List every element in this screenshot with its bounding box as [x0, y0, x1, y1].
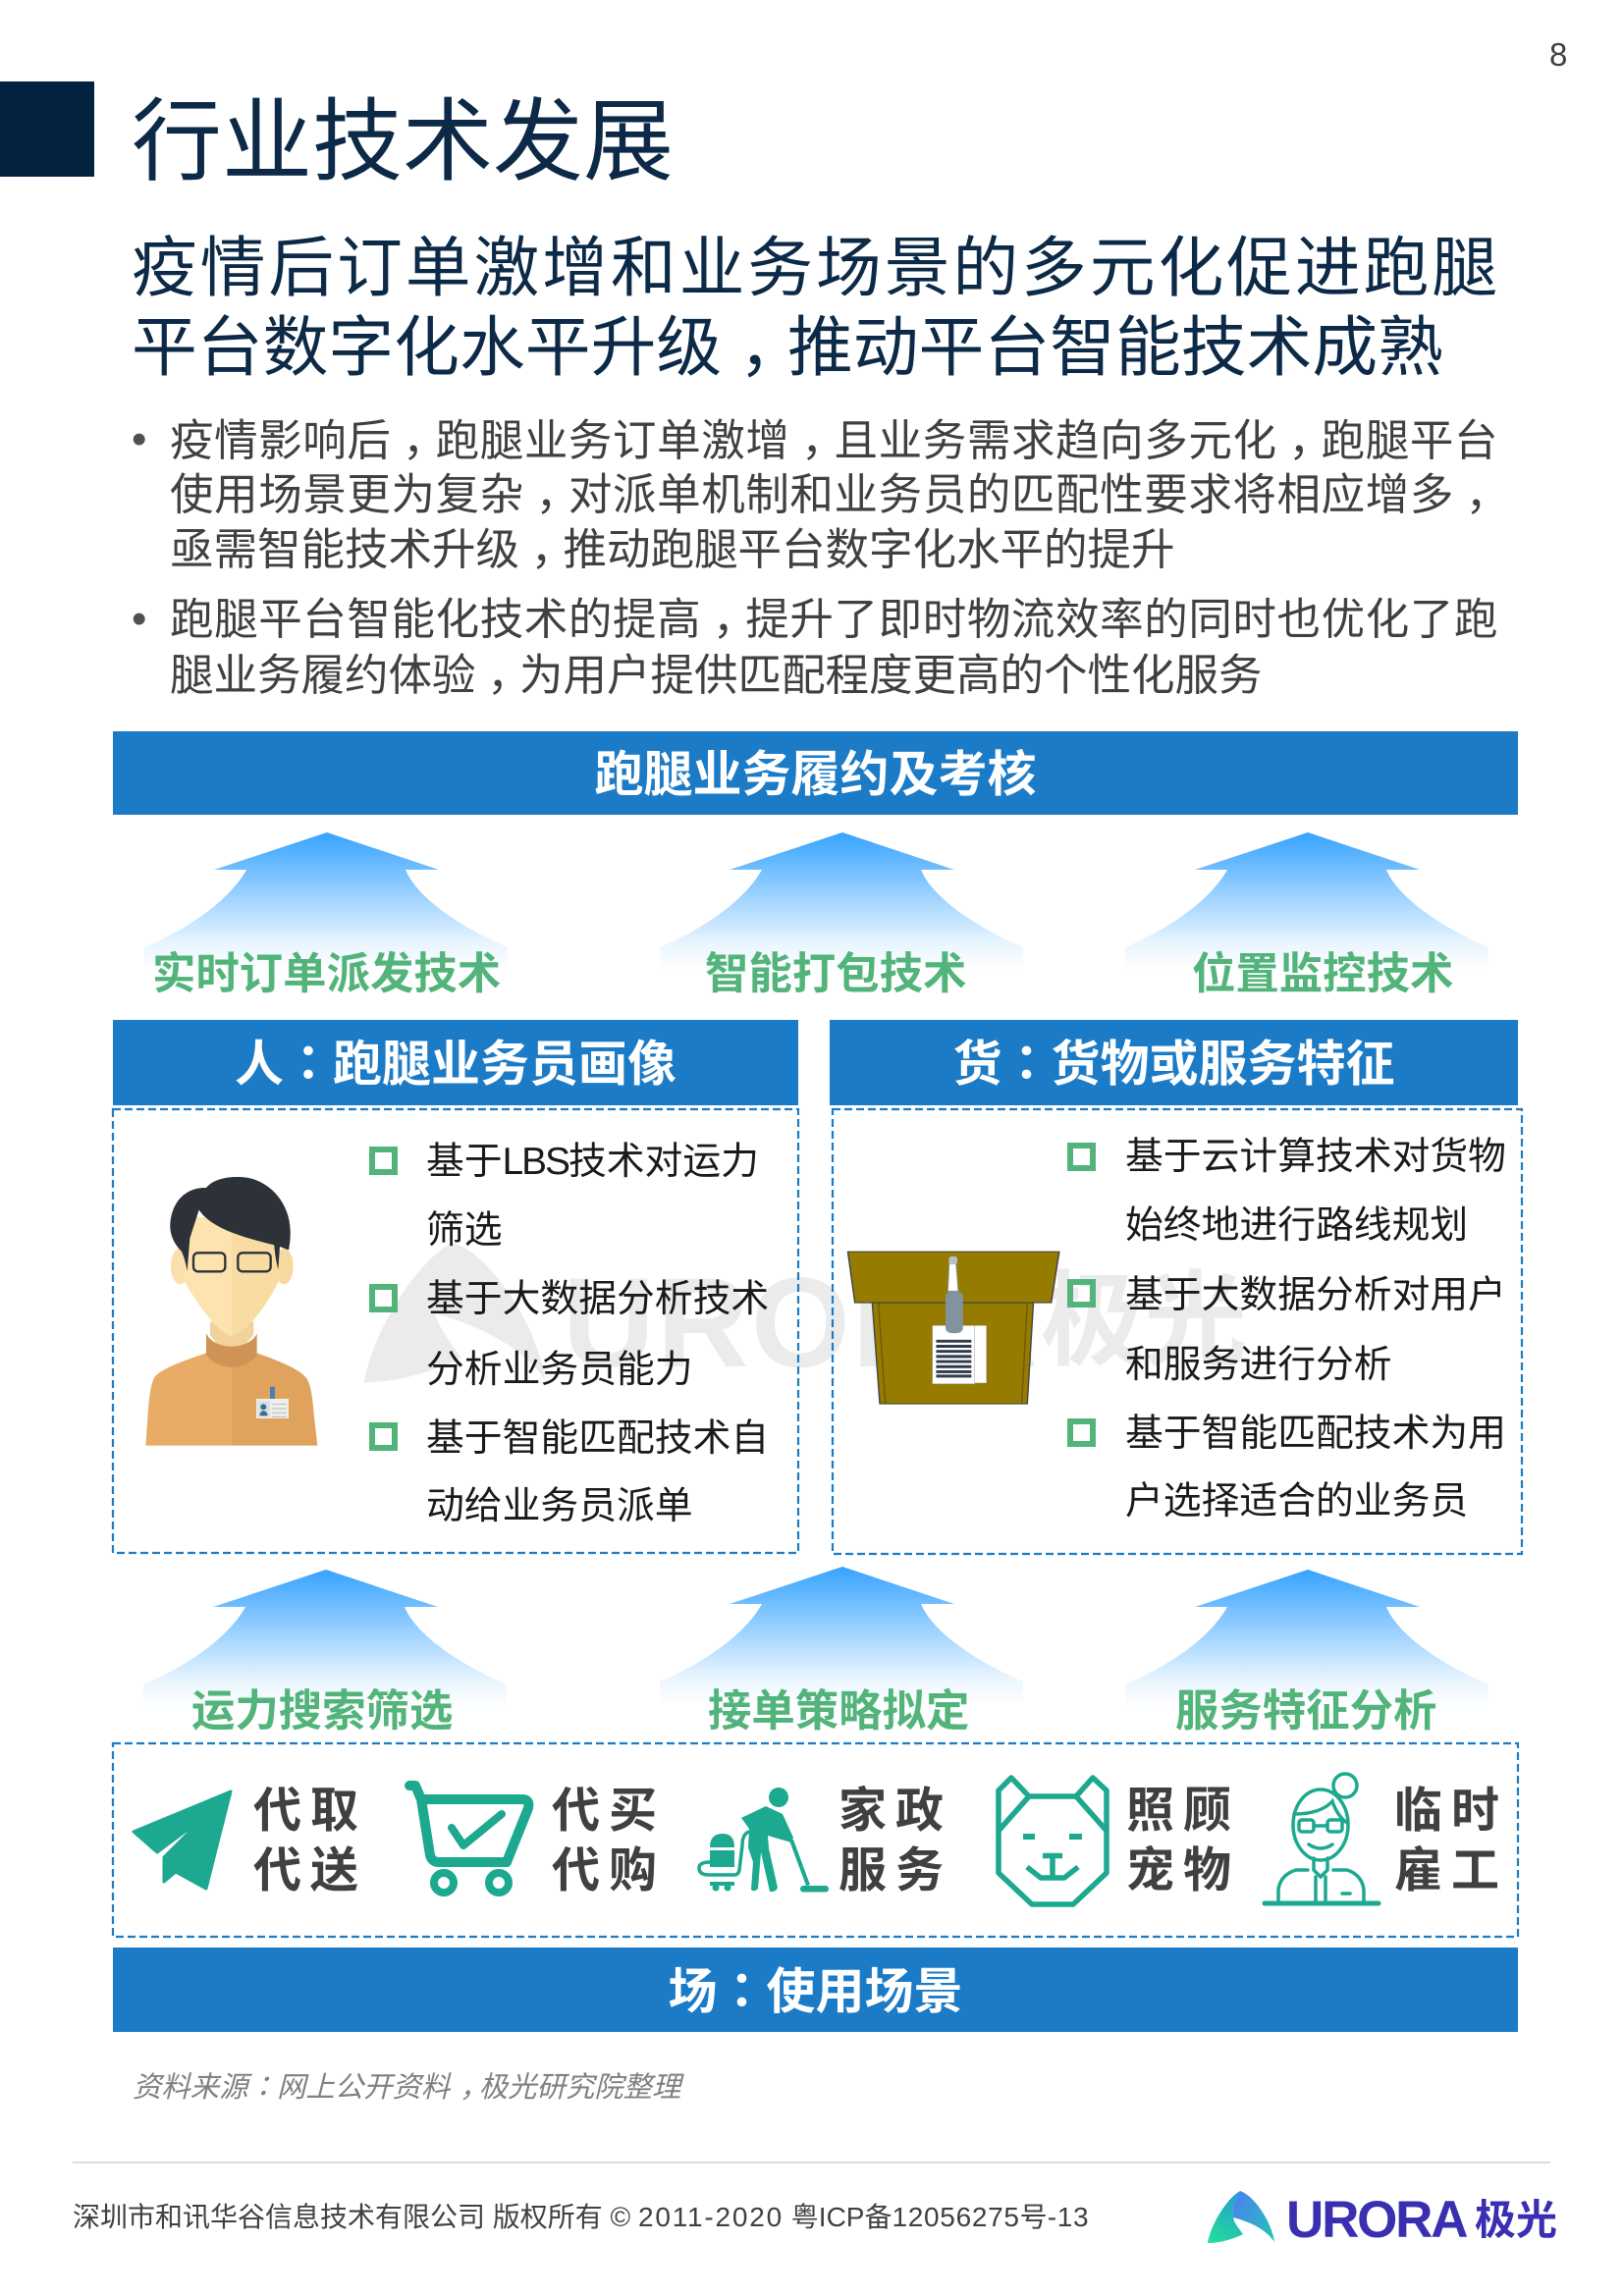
page number: 8	[1549, 36, 1567, 73]
item 1 continuation: 始终地进行路线规划	[1125, 1203, 1468, 1247]
text: housekeeping: 家政	[839, 1785, 952, 1838]
text: purchase on behalf: 代买	[552, 1785, 666, 1838]
item 2: 基于大数据分析技术	[426, 1278, 769, 1319]
item 2 continuation: 和服务进行分析	[1125, 1343, 1392, 1386]
goods bar: 货：货物或服务特征	[952, 1025, 1394, 1095]
item 1 continuation: 筛选	[426, 1209, 503, 1251]
bullet point 1: 亟需智能技术升级，推动跑腿平台数字化水平的提升	[170, 526, 1175, 590]
item 2: 基于大数据分析对用户	[1125, 1274, 1506, 1315]
logo text latin: URORA	[1286, 2191, 1466, 2249]
checkbox 1	[1067, 1143, 1096, 1171]
bullet point 2: 跑腿平台智能化技术的提高，提升了即时物流效率的同时也优化了跑	[170, 596, 1498, 660]
text: pet care	[1126, 1785, 1240, 1896]
bullet point 2: 腿业务履约体验，为用户提供匹配程度更高的个性化服务	[170, 652, 1263, 716]
goods bar	[830, 1020, 1518, 1105]
label: order strategy: 接单策略拟定	[708, 1687, 969, 1735]
person bar: 人：跑腿业务员画像	[235, 1025, 676, 1095]
bottom bar: scenarios: 场：使用场景	[668, 1952, 962, 2023]
text: purchase on behalf: 代购	[552, 1843, 666, 1896]
subtitle line 2: 平台数字化水平升级，推动平台智能技术成熟	[132, 312, 1443, 409]
item 3: 基于智能匹配技术为用	[1125, 1412, 1506, 1455]
text: housekeeping	[839, 1785, 952, 1896]
text: pet care: 宠物	[1126, 1843, 1240, 1896]
item 3 continuation: 户选择适合的业务员	[1125, 1480, 1468, 1522]
subtitle line 1: 疫情后订单激增和业务场景的多元化促进跑腿	[132, 232, 1500, 304]
text: pick up and deliver: 代送	[253, 1843, 367, 1896]
item 3 continuation: 动给业务员派单	[426, 1484, 693, 1527]
header square	[0, 81, 94, 177]
checkbox 2	[369, 1284, 398, 1312]
person bar	[113, 1020, 798, 1105]
arrow 1	[144, 832, 508, 987]
text: temp hiring: 雇工	[1394, 1843, 1508, 1896]
label: location monitoring: 位置监控技术	[1192, 950, 1453, 998]
text: housekeeping: 服务	[839, 1843, 952, 1896]
text: purchase on behalf	[552, 1785, 666, 1896]
bullet point 1	[132, 415, 1498, 590]
bullet point 1: •	[132, 415, 146, 463]
top bar: fulfilment and assessment: 跑腿业务履约及考核	[595, 747, 1037, 802]
checkbox 1	[369, 1147, 398, 1175]
bullet point 2	[132, 595, 1498, 716]
source note: 资料来源：网上公开资料，极光研究院整理	[133, 2064, 680, 2114]
arrow 4	[143, 1570, 507, 1724]
bullet point 1: 疫情影响后，跑腿业务订单激增，且业务需求趋向多元化，跑腿平台	[170, 416, 1498, 481]
logo mark	[1208, 2191, 1274, 2243]
arrow 3	[1125, 832, 1488, 987]
label: service feature analysis: 服务特征分析	[1175, 1687, 1436, 1735]
logo	[1208, 2191, 1557, 2249]
bullet point 1: 使用场景更为复杂，对派单机制和业务员的匹配性要求将相应增多，	[170, 471, 1498, 535]
text: temp hiring: 临时	[1394, 1785, 1508, 1838]
item 1: 基于LBS技术对运力	[426, 1141, 759, 1182]
bullet point 2: •	[132, 595, 146, 642]
label: realtime dispatch: 实时订单派发技术	[152, 950, 501, 998]
watermark: URORA	[563, 1251, 1041, 1394]
arrow 2	[660, 832, 1023, 987]
text: temp hiring	[1394, 1785, 1508, 1896]
logo text chinese: 极光	[1475, 2197, 1557, 2243]
checkbox 2	[1067, 1279, 1096, 1308]
arrow 6	[1125, 1570, 1488, 1724]
label: capacity search: 运力搜索筛选	[191, 1687, 453, 1735]
item 2 continuation: 分析业务员能力	[426, 1349, 693, 1390]
item 3: 基于智能匹配技术自	[426, 1417, 769, 1459]
left list	[369, 1141, 769, 1527]
text: pick up and deliver: 代取	[253, 1785, 367, 1838]
item 1: 基于云计算技术对货物	[1125, 1135, 1506, 1178]
right list	[1067, 1135, 1506, 1522]
subtitle	[132, 232, 1500, 409]
watermark: 极光	[1041, 1264, 1247, 1379]
title: 行业技术发展	[132, 92, 674, 192]
checkbox 3	[369, 1422, 398, 1451]
arrow 5	[660, 1567, 1023, 1721]
checkbox 3	[1067, 1418, 1096, 1447]
bottom bar: scenarios	[113, 1948, 1518, 2032]
watermark	[364, 1243, 1247, 1394]
footer divider	[73, 2162, 1550, 2163]
text: pet care: 照顾	[1126, 1785, 1240, 1838]
text: pick up and deliver	[253, 1785, 367, 1896]
label: smart packing: 智能打包技术	[705, 950, 966, 998]
top bar: fulfilment and assessment	[113, 731, 1518, 815]
copyright: 深圳市和讯华谷信息技术有限公司 版权所有 © 2011-2020 粤ICP备12056275号-13	[73, 2202, 1089, 2232]
